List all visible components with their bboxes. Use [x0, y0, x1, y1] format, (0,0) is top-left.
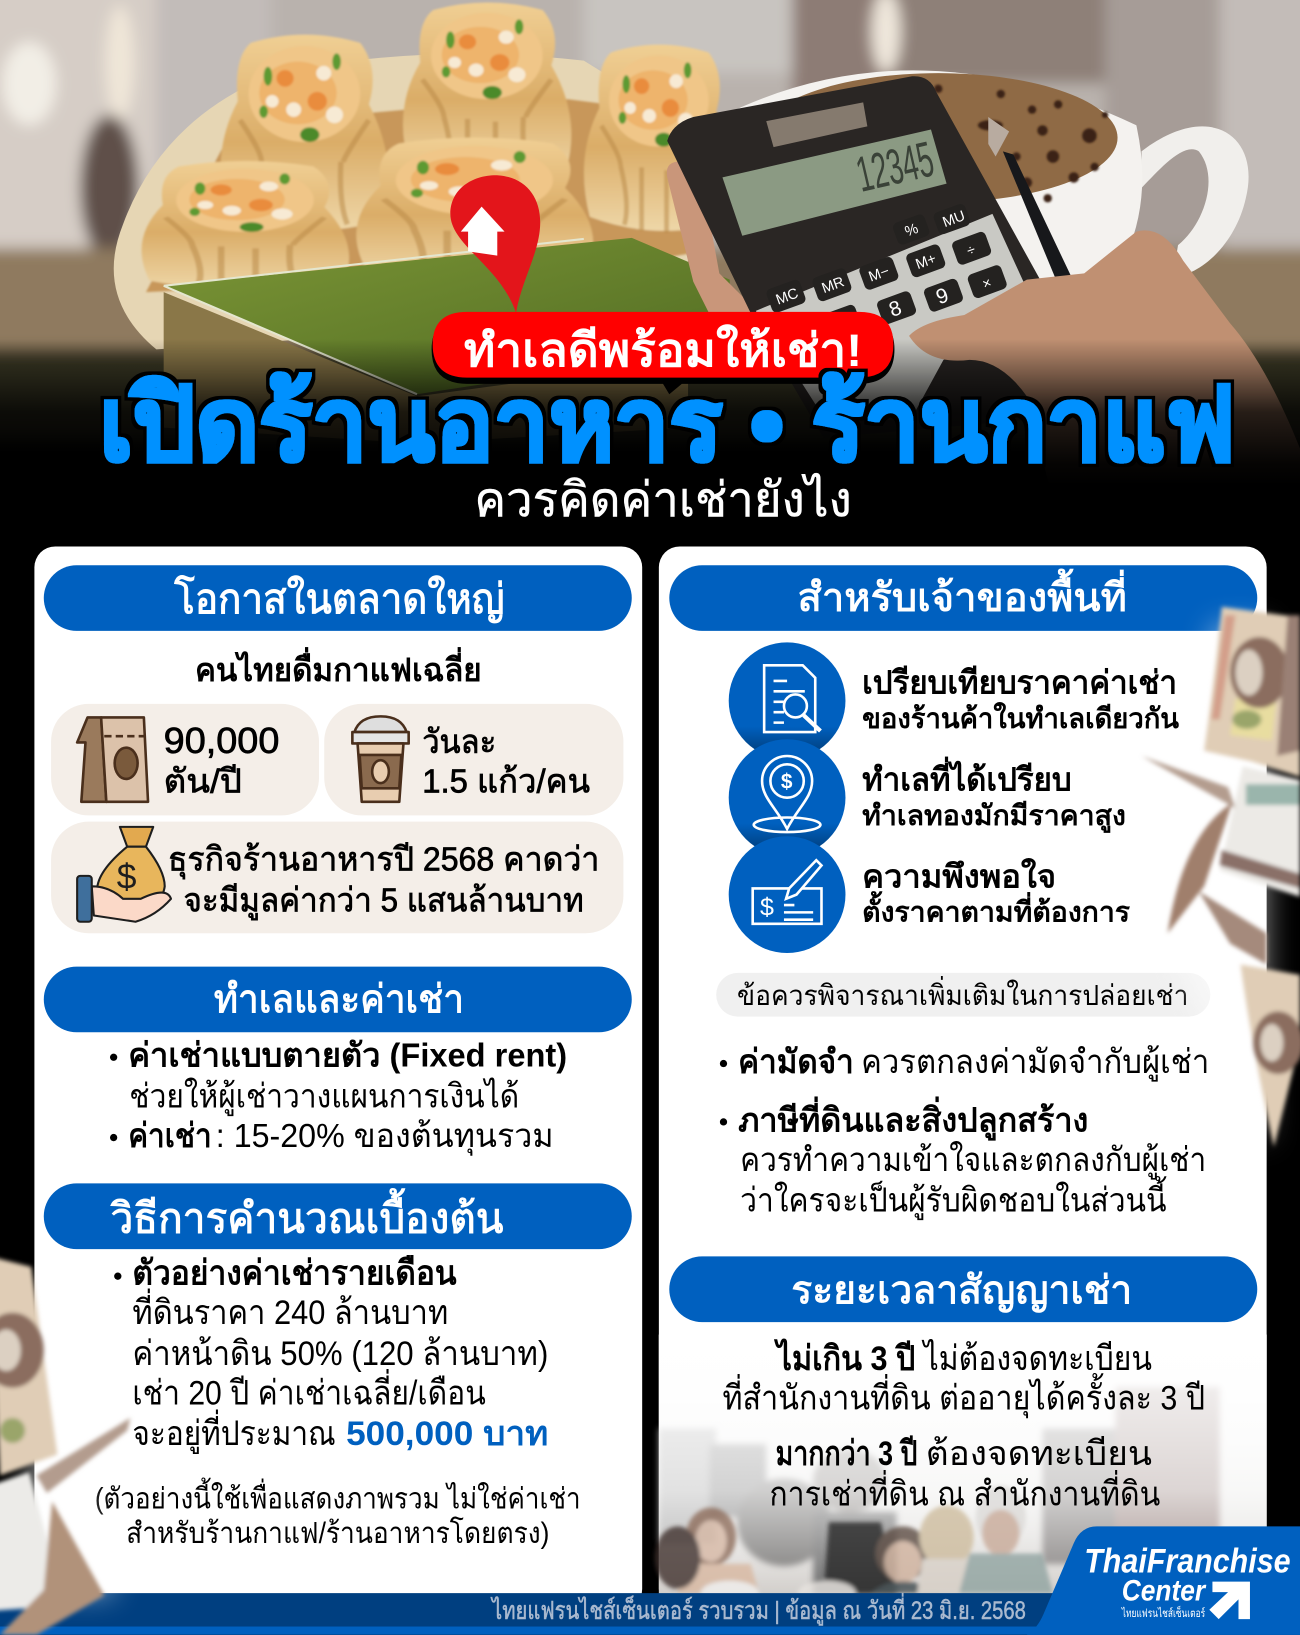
considerations bullet list: ควรทำความเข้าใจและตกลงกับผู้เช่า: [740, 1141, 1206, 1180]
location pin with house: [450, 175, 540, 313]
coffee drinking subheading: คนไทยดื่มกาแฟเฉลี่ย: [195, 647, 482, 688]
calculation example: ที่ดินราคา 240 ล้านบาท: [132, 1288, 448, 1332]
owner benefit: advantageous location: [729, 739, 1126, 856]
lease duration text: ไม่เกิน 3 ปี: [773, 1338, 915, 1378]
disclaimer note: (ตัวอย่างนี้ใช้เพื่อแสดงภาพรวม ไม่ใช่ค่าเช่า: [95, 1478, 581, 1516]
lease duration text: ไม่ต้องจดทะเบียน: [921, 1339, 1152, 1378]
heading: for land owners: [669, 565, 1257, 631]
icon: money bag on hand: [77, 827, 171, 922]
red badge: ทำเลดีพร้อมให้เช่า!: [464, 323, 862, 376]
heading: location and rent: ทำเลและค่าเช่า: [214, 977, 464, 1021]
calculator keys: [765, 203, 1008, 339]
icon: coffee bag: [77, 717, 148, 802]
heading: location and rent: [44, 967, 632, 1032]
lease duration text: ที่สำนักงานที่ดิน ต่ออายุได้ครั้งละ 3 ปี: [722, 1373, 1205, 1419]
footer bar: ไทยแฟรนไชส์เซ็นเตอร์ รวบรวม | ข้อมูล ณ วันที่ 23 มิ.ย. 2568: [490, 1593, 1026, 1626]
calculation example: ตัวอย่างค่าเช่ารายเดือน: [132, 1255, 457, 1293]
owner benefit: compare prices: ของร้านค้าในทำเลเดียวกัน: [862, 702, 1180, 734]
rent bullet list: ช่วยให้ผู้เช่าวางแผนการเงินได้: [129, 1077, 519, 1116]
owner benefit: satisfaction: ตั้งราคาตามที่ต้องการ: [862, 891, 1130, 928]
stat: cups per day: วันละ: [422, 724, 496, 761]
land block with grass: [164, 238, 730, 443]
panel: right: [655, 546, 1267, 1610]
heading: lease duration: [669, 1256, 1257, 1322]
logo: ThaiFranchise Center: ไทยแฟรนไชส์เซ็นเตอร์: [1121, 1605, 1205, 1620]
calculator: MC: [774, 286, 801, 308]
calculation example: 500,000 บาท: [346, 1415, 548, 1453]
owner benefit: compare prices: เปรียบเทียบราคาค่าเช่า: [862, 664, 1177, 700]
thumb left hand: [667, 162, 759, 355]
calculator: M+: [914, 251, 939, 273]
main title: เปิดร้านอาหาร • ร้านกาแฟ: [99, 368, 1235, 482]
calculator: MR: [820, 274, 847, 297]
blurred restaurant backdrop: [0, 0, 1300, 443]
panel: left: [34, 546, 642, 1610]
considerations bullet list: ควรตกลงค่ามัดจำกับผู้เช่า: [861, 1044, 1209, 1082]
icon: location pin with dollar: $: [781, 770, 793, 793]
icon: money bag on hand: $: [117, 856, 137, 896]
stat: cups per day: [324, 704, 623, 815]
calculator: ×: [980, 275, 994, 293]
disclaimer note: สำหรับร้านกาแฟ/ร้านอาหารโดยตรง): [126, 1516, 549, 1550]
owner benefit: compare prices: [729, 642, 1180, 759]
calculator: [667, 76, 1113, 438]
lease duration text: มากกว่า 3 ปี: [776, 1435, 917, 1473]
lease duration text: การเช่าที่ดิน ณ สำนักงานที่ดิน: [769, 1470, 1160, 1514]
dumplings: [142, 2, 734, 292]
rent bullet list: [110, 1038, 567, 1156]
calculator: %: [903, 221, 921, 240]
rent bullet list: ค่าเช่า: [128, 1118, 212, 1155]
icon: cheque and pen: $: [760, 893, 774, 921]
disclaimer note: [95, 1478, 581, 1550]
icon: cheque and pen: [753, 860, 821, 924]
heading: lease duration: ระยะเวลาสัญญาเช่า: [791, 1268, 1132, 1312]
stat: tons per year: [51, 704, 319, 815]
icon: document with magnifier: [764, 665, 820, 732]
calculator: 12345: [851, 131, 939, 203]
heading: market opportunity: โอกาสในตลาดใหญ่: [174, 575, 505, 623]
logo: ThaiFranchise Center: [1027, 1526, 1300, 1635]
icon: location pin with dollar: [754, 756, 820, 832]
owner benefit: satisfaction: ความพึงพอใจ: [862, 857, 1056, 894]
calculator: M−: [867, 263, 892, 286]
icon: coffee cup: [352, 716, 409, 802]
considerations bullet list: [720, 1044, 1209, 1221]
heading: calculation method: วิธีการคำนวณเบื้องต้น: [111, 1188, 504, 1241]
coffee cup: [725, 70, 1249, 292]
calculation example: เช่า 20 ปี ค่าเช่าเฉลี่ย/เดือน: [132, 1368, 486, 1412]
heading: for land owners: สำหรับเจ้าของพื้นที่: [798, 569, 1127, 620]
crowd photo backdrop: [655, 1335, 1267, 1606]
banknote left: [0, 1256, 130, 1635]
calculation example: ค่าหน้าดิน 50% (120 ล้านบาท): [132, 1335, 548, 1373]
hero photo collage: [0, 0, 1300, 515]
lease duration text: ต้องจดทะเบียน: [926, 1435, 1152, 1473]
rent bullet list: ค่าเช่าแบบตายตัว (Fixed rent): [128, 1038, 567, 1075]
footer bar: [0, 1593, 1300, 1635]
additional considerations label: ข้อควรพิจารณาเพิ่มเติมในการปล่อยเช่า: [737, 976, 1188, 1011]
subtitle: ควรคิดค่าเช่ายังไง: [474, 472, 852, 527]
stat: restaurant market value: จะมีมูลค่ากว่า 5 แสนล้านบาท: [183, 882, 584, 920]
red badge: [432, 312, 894, 394]
stat: tons per year: ตัน/ปี: [164, 763, 242, 800]
owner benefit: advantageous location: ทำเลที่ได้เปรียบ: [862, 756, 1072, 797]
owner benefit: advantageous location: ทำเลทองมักมีราคาสูง: [862, 800, 1126, 833]
plate: [114, 54, 688, 349]
calculator: MU: [941, 208, 967, 231]
considerations bullet list: ว่าใครจะเป็นผู้รับผิดชอบในส่วนนี้: [740, 1176, 1167, 1221]
calculation example: [114, 1255, 548, 1454]
stat: restaurant market value: [51, 822, 623, 933]
considerations bullet list: ภาษีที่ดินและสิ่งปลูกสร้าง: [738, 1095, 1088, 1141]
stat: restaurant market value: ธุรกิจร้านอาหารปี 2568 คาดว่า: [168, 842, 599, 880]
rent bullet list: : 15-20% ของต้นทุนรวม: [216, 1118, 554, 1156]
owner benefit: satisfaction: [729, 836, 1130, 953]
banknotes right: [1142, 607, 1300, 1147]
calculator: 9: [933, 284, 952, 309]
icon: arrow: [1209, 1582, 1250, 1619]
considerations bullet list: ค่ามัดจำ: [738, 1044, 854, 1081]
calculation example: จะอยู่ที่ประมาณ: [132, 1409, 336, 1454]
calculator: 8: [886, 296, 905, 322]
heading: calculation method: [44, 1183, 632, 1249]
heading: market opportunity: [44, 565, 632, 631]
additional considerations label: [716, 973, 1210, 1017]
logo: ThaiFranchise Center: Center: [1122, 1575, 1207, 1607]
pen: [1003, 151, 1081, 303]
stat: cups per day: 1.5 แก้ว/คน: [422, 763, 590, 800]
calculator: ÷: [965, 242, 978, 260]
stat: tons per year: 90,000: [164, 720, 279, 761]
lease duration text: [722, 1338, 1205, 1514]
writing hand: [909, 230, 1300, 501]
fade to black: [0, 339, 1300, 485]
